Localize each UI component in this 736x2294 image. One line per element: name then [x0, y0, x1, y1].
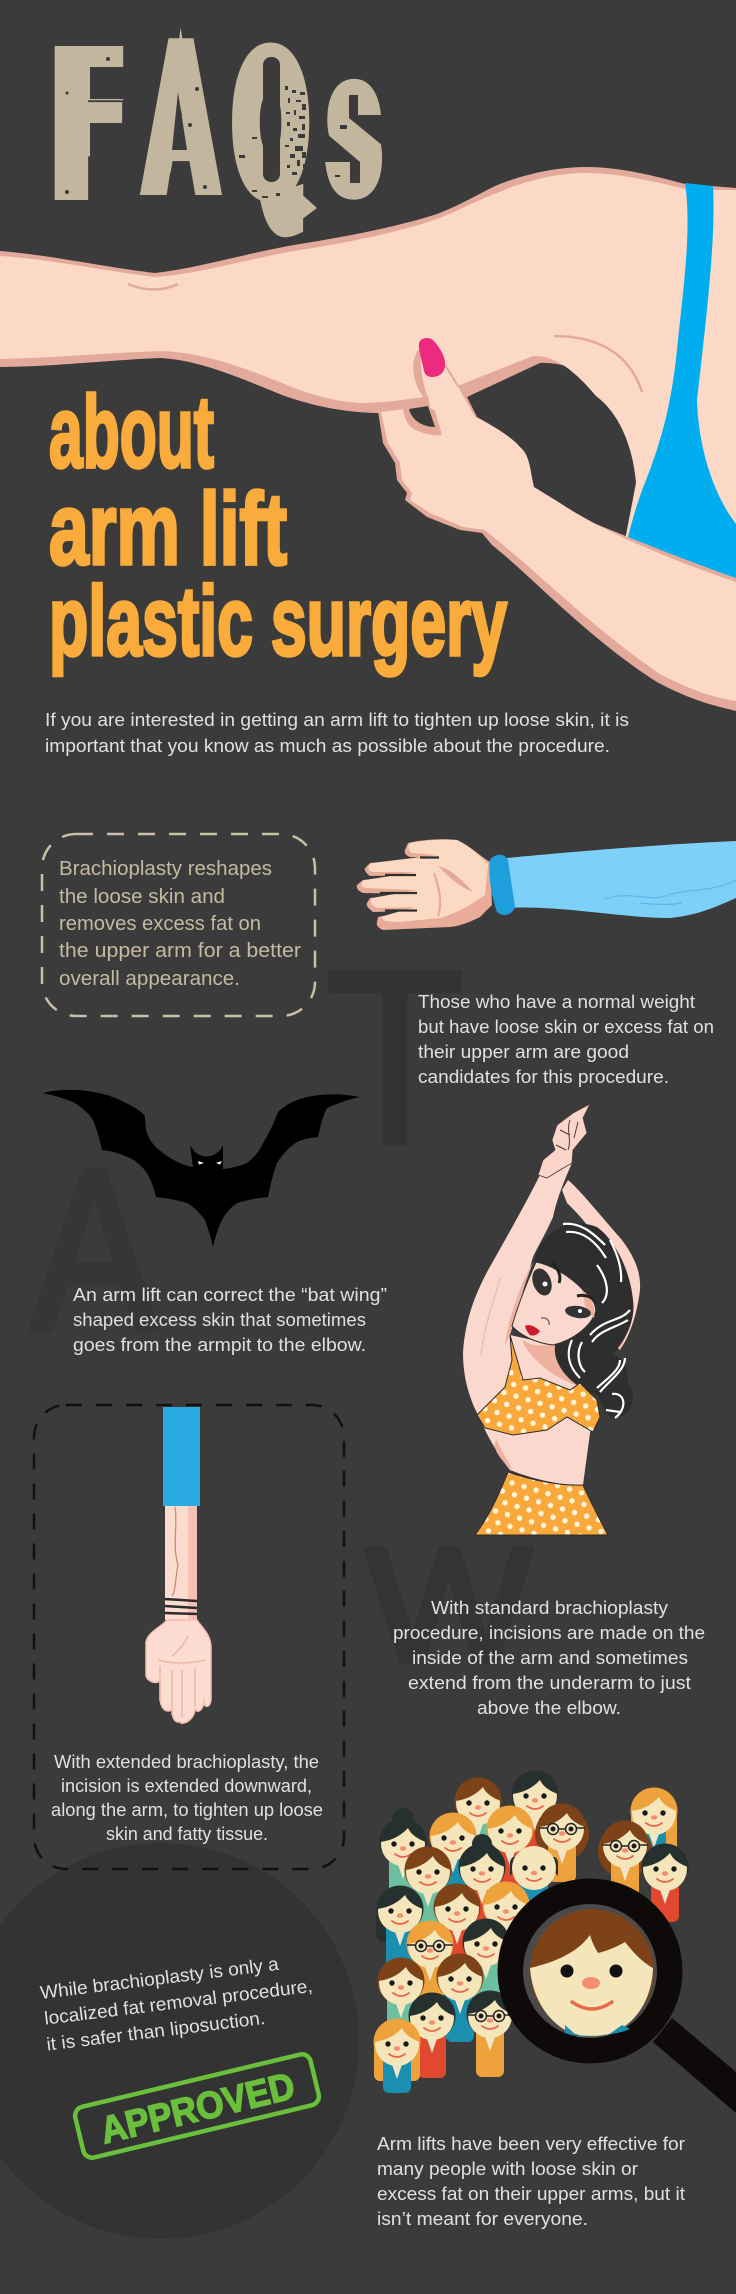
caption: along the arm, to tighten up loose [51, 1799, 323, 1820]
person with glasses [406, 1920, 454, 2003]
title: FAQs: A [146, 8, 216, 224]
person [404, 1846, 452, 1925]
palm shadow [357, 839, 492, 930]
hand [146, 1620, 211, 1723]
person [378, 1958, 424, 2034]
illustration: crowd of people [374, 1770, 688, 2093]
stamp: approved: APPROVED [97, 2065, 299, 2152]
sleeve fold lines [605, 880, 736, 904]
blue sleeve [163, 1407, 200, 1506]
wrist bands [165, 1599, 197, 1614]
text: standard brachioplasty: inside of the arm and sometimes [412, 1647, 688, 1668]
far arm [562, 1180, 640, 1350]
person [642, 1844, 688, 1922]
callout: brachioplasty definition: overall appearance. [59, 968, 240, 990]
caption: skin and fatty tissue. [106, 1823, 268, 1844]
subtitle: about arm lift plastic surgery [49, 375, 507, 676]
collar [565, 2025, 630, 2037]
subtitle: about arm lift plastic surgery: plastic surgery [49, 566, 507, 676]
hair highlights [563, 1224, 630, 1418]
face shadow [582, 1290, 594, 1318]
intro paragraph: important that you know as much as possible about the procedure. [45, 735, 610, 756]
gap between thumb and fingers [409, 406, 435, 427]
caption [51, 1751, 323, 1844]
letter counters [90, 57, 388, 207]
text: standard brachioplasty: above the elbow. [477, 1697, 621, 1718]
subtitle: about arm lift plastic surgery: about [49, 375, 214, 489]
text: safer than liposuction: it is safer than liposuction. [45, 2007, 266, 2055]
illustration: hand and blue sleeve [357, 839, 736, 930]
text: safer than liposuction: localized fat removal procedure, [43, 1975, 314, 2029]
far arm shading [609, 1285, 631, 1350]
person [408, 1992, 456, 2078]
clasped hands [538, 1104, 590, 1178]
face [512, 1262, 596, 1345]
neck shadow [522, 1340, 578, 1386]
icon: black bat [43, 1090, 360, 1247]
watermark letter W: W [366, 1515, 532, 1696]
pink fingernail [419, 338, 445, 377]
forearm and hand skin [381, 345, 736, 701]
person [482, 1882, 530, 1960]
lens [523, 1904, 657, 2038]
palm lines [158, 1636, 205, 1718]
callout: brachioplasty definition: the upper arm for a better [59, 940, 301, 962]
intro paragraph: If you are interested in getting an arm lift to tighten up loose skin, it is [45, 709, 629, 730]
person with long hair [630, 1788, 678, 1858]
text: standard brachioplasty: With standard brachioplasty [431, 1597, 669, 1618]
title: FAQs: F [58, 26, 117, 220]
right eye [564, 1304, 592, 1320]
elbow crease [128, 284, 178, 290]
sleeve [507, 841, 736, 918]
inner arm shadow [505, 1262, 533, 1345]
text: bat wing: An arm lift can correct the “bat wing” [73, 1284, 387, 1305]
callout: brachioplasty definition: Brachioplasty reshapes [59, 858, 272, 880]
forearm and hand shadow [378, 395, 736, 711]
thumb crescent shadow [413, 350, 428, 398]
cuff [489, 855, 515, 915]
watermark letter A: A [32, 1123, 156, 1376]
person [436, 1954, 484, 2042]
left eye [529, 1266, 555, 1298]
smile [572, 2002, 612, 2009]
text: effective for many [377, 2133, 685, 2229]
illustration: raised arm and torso with blue top [0, 167, 736, 711]
callout: brachioplasty definition: the loose skin and [59, 886, 225, 908]
person [430, 1812, 476, 1887]
hair [535, 1223, 633, 1418]
watermark letter T: T [325, 918, 465, 1197]
caption: incision is extended downward, [61, 1775, 312, 1796]
panel: extended brachioplasty [34, 1405, 344, 1869]
bald person [510, 1846, 558, 1918]
finger lines [556, 1120, 578, 1150]
text: good candidates [418, 991, 714, 1087]
text: good candidates: candidates for this procedure. [418, 1066, 669, 1087]
forearm [165, 1505, 197, 1620]
finger gaps [380, 858, 439, 910]
text: bat wing: goes from the armpit to the elbow. [73, 1334, 366, 1355]
person with long hair [374, 2018, 420, 2093]
callout: brachioplasty definition: removes excess fat on [59, 913, 261, 935]
face [530, 1935, 653, 2036]
text: effective for many: excess fat on their upper arms, but it [377, 2183, 685, 2204]
callout: brachioplasty definition [42, 834, 315, 1016]
armpit crease [554, 336, 642, 392]
text: good candidates: Those who have a normal weight [418, 991, 695, 1012]
illustration: woman with raised arms [463, 1104, 640, 1535]
person [434, 1884, 480, 1968]
Q tail [273, 190, 317, 223]
nose [541, 1318, 549, 1325]
person [462, 1918, 510, 2003]
text: safer than liposuction [39, 1949, 317, 2055]
arm skin [0, 173, 736, 620]
lips [525, 1325, 540, 1336]
person with glasses [466, 1990, 514, 2077]
text: effective for many: isn’t meant for everyone. [377, 2208, 588, 2229]
title: FAQs [58, 8, 388, 225]
text: bat wing: shaped excess skin that sometimes [73, 1309, 366, 1330]
palm and fingers [361, 840, 488, 922]
person [458, 1834, 506, 1922]
near arm and torso [463, 1163, 597, 1485]
palm creases [438, 866, 473, 892]
text: standard brachioplasty: extend from the underarm to just [408, 1672, 691, 1693]
person [454, 1778, 502, 1852]
text: good candidates: but have loose skin or excess fat on [418, 1016, 714, 1037]
subtitle: about arm lift plastic surgery: arm lift [49, 472, 287, 586]
side waist shadow [495, 1440, 512, 1470]
polka dot skirt [475, 1472, 608, 1535]
incision scar [172, 1507, 178, 1596]
dark circle behind liposuction note [0, 1843, 359, 2239]
thumb edge lines [445, 365, 458, 386]
gap ring between thumb and fingers [403, 404, 442, 435]
rim [498, 1878, 682, 2064]
forearm shade [188, 1505, 197, 1620]
arm scar [481, 1278, 500, 1355]
illustration: arm with blue sleeve [146, 1407, 211, 1723]
text: standard brachioplasty: procedure, incisions are made on the [393, 1622, 705, 1643]
person [486, 1806, 534, 1888]
handle [653, 2018, 736, 2113]
text: effective for many: many people with loose skin or [377, 2158, 638, 2179]
blue bra [628, 183, 736, 590]
text: safer than liposuction: While brachioplasty is only a [39, 1953, 280, 2003]
person [376, 1886, 424, 1970]
text: good candidates: their upper arm are good [418, 1041, 629, 1062]
person [512, 1770, 558, 1853]
person with glasses [535, 1804, 589, 1882]
title: FAQs: Q [236, 19, 306, 225]
text: standard brachioplasty [393, 1597, 705, 1718]
nose [582, 1977, 600, 1989]
person with glasses [598, 1820, 652, 1900]
icon: magnifying glass on a face [498, 1878, 736, 2113]
text: bat wing [73, 1284, 387, 1355]
text: effective for many: Arm lifts have been very effective for [377, 2133, 685, 2154]
title: FAQs: s [329, 28, 379, 222]
person [380, 1808, 426, 1901]
distressed print specks [65, 57, 347, 198]
hair [530, 1909, 654, 2033]
arm shadow edge [0, 167, 736, 620]
bat eyes [198, 1161, 222, 1164]
polka dot top [477, 1335, 600, 1435]
caption: With extended brachioplasty, the [54, 1751, 319, 1772]
brows and nose [552, 1263, 594, 1301]
eyes [560, 1964, 574, 1978]
intro paragraph [45, 709, 629, 756]
